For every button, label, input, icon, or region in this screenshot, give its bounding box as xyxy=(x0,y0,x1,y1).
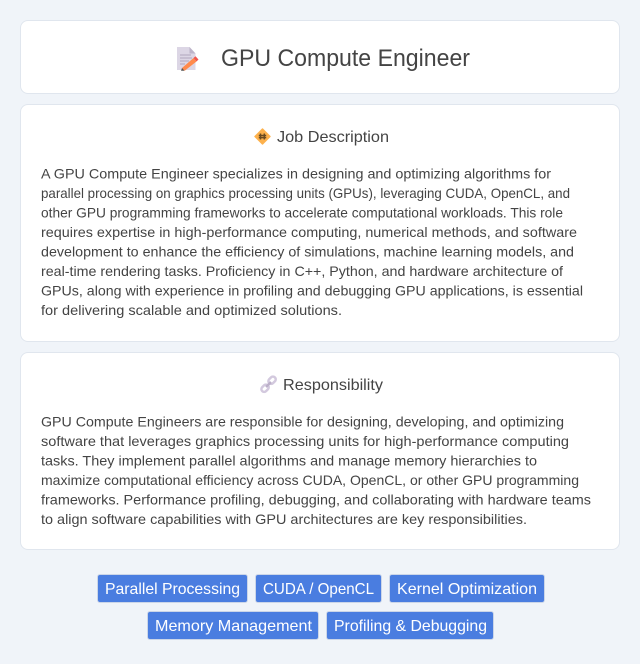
panel: responsibility xyxy=(20,352,620,550)
text block: responsibility: maximize computational efficiency across CUDA, OpenCL, or other GPU programming xyxy=(41,472,579,488)
tag: memory management: Memory Management xyxy=(154,618,312,634)
tag: parallel processing: Parallel Processing xyxy=(104,580,240,598)
panel: title card xyxy=(20,20,620,94)
text block: responsibility: to align software capabilities with GPU architectures are key responsibilities. xyxy=(41,511,527,527)
title: GPU Compute Engineer xyxy=(221,45,470,72)
text block: responsibility: tasks. They implement parallel algorithms and manage memory hierarchies to xyxy=(41,452,537,468)
text block: job description: real-time rendering tasks. Proficiency in C++, Python, and hardware architecture of xyxy=(41,263,563,279)
text block: job description: for delivering scalable and optimized solutions. xyxy=(41,302,342,318)
heading: job description: Job Description xyxy=(277,129,389,146)
tags xyxy=(97,574,545,640)
text block: job description: parallel processing on graphics processing units (GPUs), leveraging CUDA, OpenCL, and xyxy=(41,185,570,201)
tag: parallel processing xyxy=(96,574,248,603)
icon: memo with pencil xyxy=(177,47,198,71)
tag: memory management xyxy=(146,610,318,640)
text block: responsibility: software that leverages graphics processing units for high-performance computing xyxy=(41,433,569,449)
text block: responsibility xyxy=(41,414,591,527)
text block: job description xyxy=(41,166,583,318)
text block: job description: development to enhance the efficiency of simulations, machine learning models, and xyxy=(41,244,574,260)
icon: orange diamond xyxy=(254,128,271,145)
tag: kernel optimization xyxy=(388,574,544,603)
text block: job description: requires expertise in high-performance computing, numerical methods, and software xyxy=(41,224,577,240)
text block: job description: GPUs, along with experience in profiling and debugging GPU applications, is essential xyxy=(41,282,583,298)
heading: responsibility: Responsibility xyxy=(283,377,383,394)
panel: job description xyxy=(20,104,620,342)
tag: cuda opencl xyxy=(254,574,382,603)
text block: job description: A GPU Compute Engineer specializes in designing and optimizing algorithms for xyxy=(41,166,551,182)
text block: responsibility: GPU Compute Engineers are responsible for designing, developing, and optimizing xyxy=(41,414,564,430)
tag: profiling debugging: Profiling & Debugging xyxy=(334,618,486,634)
text block: job description: other GPU programming frameworks to accelerate computational workloads. This role xyxy=(41,204,563,220)
tag: kernel optimization: Kernel Optimization xyxy=(396,580,536,598)
text block: responsibility: frameworks. Performance profiling, debugging, and collaborating with hardware teams xyxy=(41,492,591,508)
icon: chain link xyxy=(260,375,277,394)
tag: profiling debugging xyxy=(326,610,494,640)
tag: cuda opencl: CUDA / OpenCL xyxy=(262,580,374,598)
